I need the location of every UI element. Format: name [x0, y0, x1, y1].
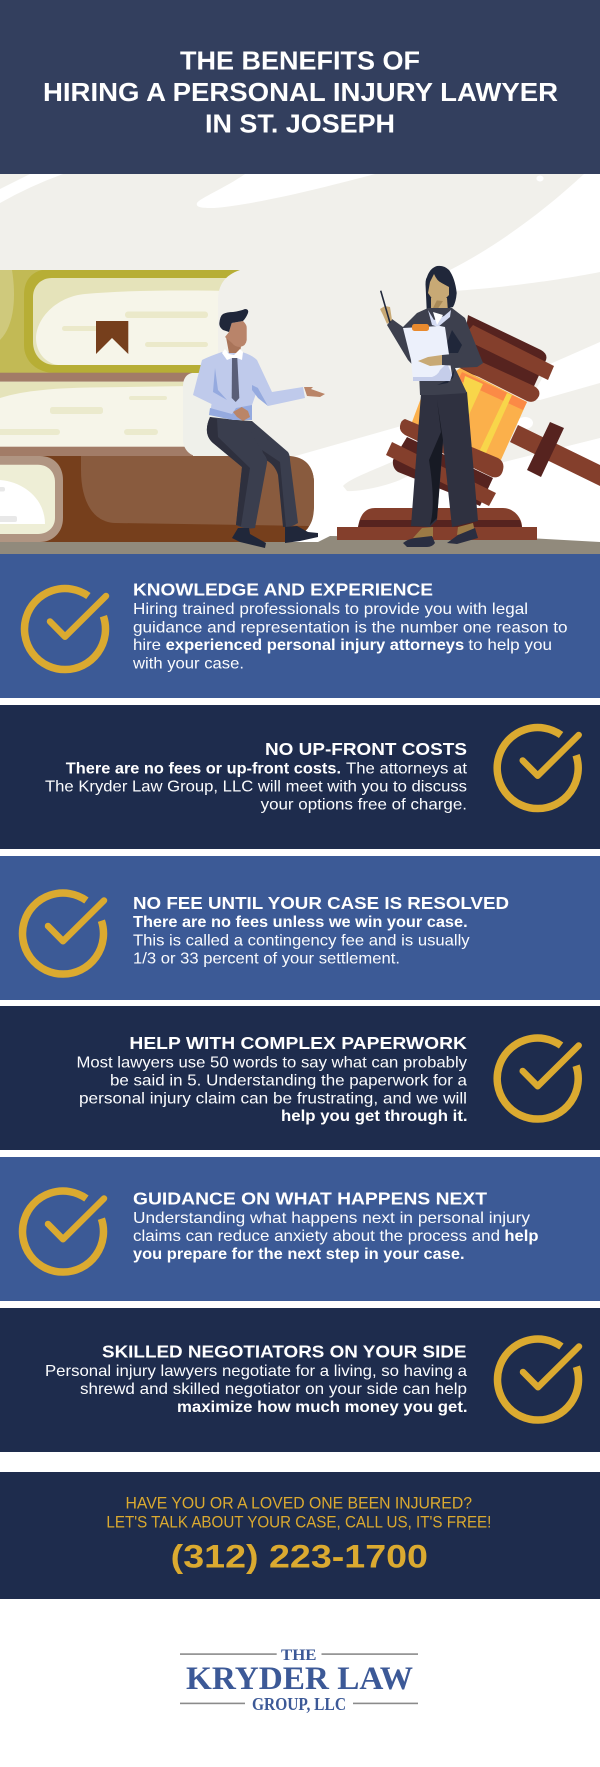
heading and text: experienced personal injury attorneys	[166, 637, 464, 654]
man sitting	[193, 309, 325, 548]
icon: check circle	[497, 728, 579, 809]
panel: complex paperwork	[0, 1006, 600, 1150]
panel: no up-front costs	[0, 705, 600, 849]
heading and text: HELP WITH COMPLEX PAPERWORK	[129, 1033, 467, 1053]
ground	[0, 536, 600, 554]
man's tie	[232, 358, 239, 402]
man's shoes	[232, 526, 318, 548]
heading and text	[133, 1189, 538, 1263]
lawyer's ankles	[413, 523, 475, 538]
background swooshes	[0, 174, 600, 545]
title: THE BENEFITS OF	[180, 46, 420, 76]
gavel ferrule	[527, 422, 564, 477]
heading and text: help you get through it.	[281, 1108, 468, 1125]
phone number: (312) 223-1700	[171, 1538, 428, 1574]
bottom book	[0, 456, 314, 542]
icon: check circle	[497, 1038, 579, 1119]
jacket inner shadow	[437, 330, 462, 385]
heading and text	[45, 1342, 468, 1416]
bookmark	[96, 321, 128, 354]
icon: check circle	[24, 589, 106, 670]
man's neck and collar	[222, 337, 243, 360]
heading and text: shrewd and skilled negotiator on your side can help	[80, 1381, 467, 1398]
lawyer's neck and face	[428, 274, 449, 312]
heading and text: This is called a contingency fee and is usually	[133, 932, 470, 949]
header panel	[0, 0, 600, 174]
heading and text: There are no fees or up-front costs.	[66, 760, 341, 777]
lawyer's raised hand and pen	[380, 291, 392, 324]
gavel sound block	[337, 508, 537, 540]
heading and text: NO FEE UNTIL YOUR CASE IS RESOLVED	[133, 893, 509, 913]
heading and text: maximize how much money you get.	[177, 1399, 468, 1416]
logo: THE	[281, 1647, 316, 1664]
heading and text	[132, 580, 568, 672]
heading and text: The Kryder Law Group, LLC will meet with you to discuss	[45, 778, 467, 795]
lawyer's sleeve	[387, 319, 410, 360]
heading and text: NO UP-FRONT COSTS	[265, 739, 467, 759]
logo: KRYDER LAW	[186, 1661, 413, 1697]
gavel head	[386, 315, 554, 506]
heading and text: claims can reduce anxiety about the process and	[133, 1228, 500, 1245]
heading and text: help	[504, 1228, 538, 1245]
top book	[0, 270, 240, 373]
icon: check circle	[22, 893, 104, 974]
heading and text: Hiring trained professionals to provide you with legal	[133, 601, 528, 618]
panel: guidance on what happens next	[0, 1157, 600, 1301]
gavel handle	[510, 425, 600, 486]
lawyer's collar	[428, 310, 451, 327]
stack of books	[0, 270, 314, 542]
heading and text: 1/3 or 33 percent of your settlement.	[133, 950, 400, 967]
call to action panel	[0, 1472, 600, 1599]
heading and text: personal injury claim can be frustrating, and we will	[79, 1090, 467, 1107]
heading and text: Most lawyers use 50 words to say what can probably	[76, 1054, 467, 1071]
heading and text: SKILLED NEGOTIATORS ON YOUR SIDE	[102, 1342, 467, 1362]
logo	[180, 1647, 418, 1714]
call to action text: LET'S TALK ABOUT YOUR CASE, CALL US, IT'S FREE!	[106, 1513, 491, 1531]
heading and text: hire	[133, 637, 161, 654]
heading and text: Understanding what happens next in personal injury	[133, 1210, 530, 1227]
panel: knowledge and experience	[0, 554, 600, 698]
panel: no fee until resolved	[0, 856, 600, 1000]
title: IN ST. JOSEPH	[205, 108, 395, 138]
man's shirt	[193, 352, 305, 420]
clipboard	[403, 324, 452, 381]
middle book	[0, 373, 235, 456]
heading and text: Personal injury lawyers negotiate for a living, so having a	[45, 1363, 467, 1380]
heading and text	[45, 739, 468, 813]
illustration	[0, 174, 600, 555]
call to action text	[106, 1495, 491, 1531]
heading and text: The attorneys at	[346, 760, 468, 777]
lawyer's hair	[426, 266, 457, 310]
logo: GROUP, LLC	[252, 1694, 346, 1714]
title	[43, 46, 558, 138]
heading and text: to help you	[468, 637, 552, 654]
heading and text: you prepare for the next step in your case.	[133, 1246, 465, 1263]
man's head	[219, 309, 248, 347]
heading and text: be said in 5. Understanding the paperwork for a	[110, 1072, 467, 1089]
heading and text: guidance and representation is the number one reason to	[133, 619, 568, 636]
heading and text: KNOWLEDGE AND EXPERIENCE	[133, 580, 433, 600]
icon: check circle	[497, 1339, 579, 1420]
lawyer's lower arm and hand	[418, 353, 483, 367]
woman lawyer	[380, 266, 483, 547]
heading and text	[133, 893, 509, 967]
lawyer's jacket	[403, 308, 483, 395]
page-end curve of top book	[218, 270, 260, 375]
heading and text: There are no fees unless we win your case.	[133, 914, 468, 931]
heading and text: your options free of charge.	[261, 796, 467, 813]
call to action text: HAVE YOU OR A LOVED ONE BEEN INJURED?	[126, 1495, 472, 1513]
icon: check circle	[22, 1191, 104, 1272]
lawyer's trousers	[411, 392, 478, 527]
gavel	[386, 315, 600, 506]
panel: skilled negotiators	[0, 1308, 600, 1452]
title: HIRING A PERSONAL INJURY LAWYER	[43, 77, 558, 107]
man's trousers	[207, 417, 298, 529]
heading and text: GUIDANCE ON WHAT HAPPENS NEXT	[133, 1189, 487, 1209]
man's hands	[233, 387, 325, 421]
lawyer's shoes	[403, 528, 478, 547]
heading and text: with your case.	[132, 655, 244, 672]
heading and text	[76, 1033, 468, 1125]
